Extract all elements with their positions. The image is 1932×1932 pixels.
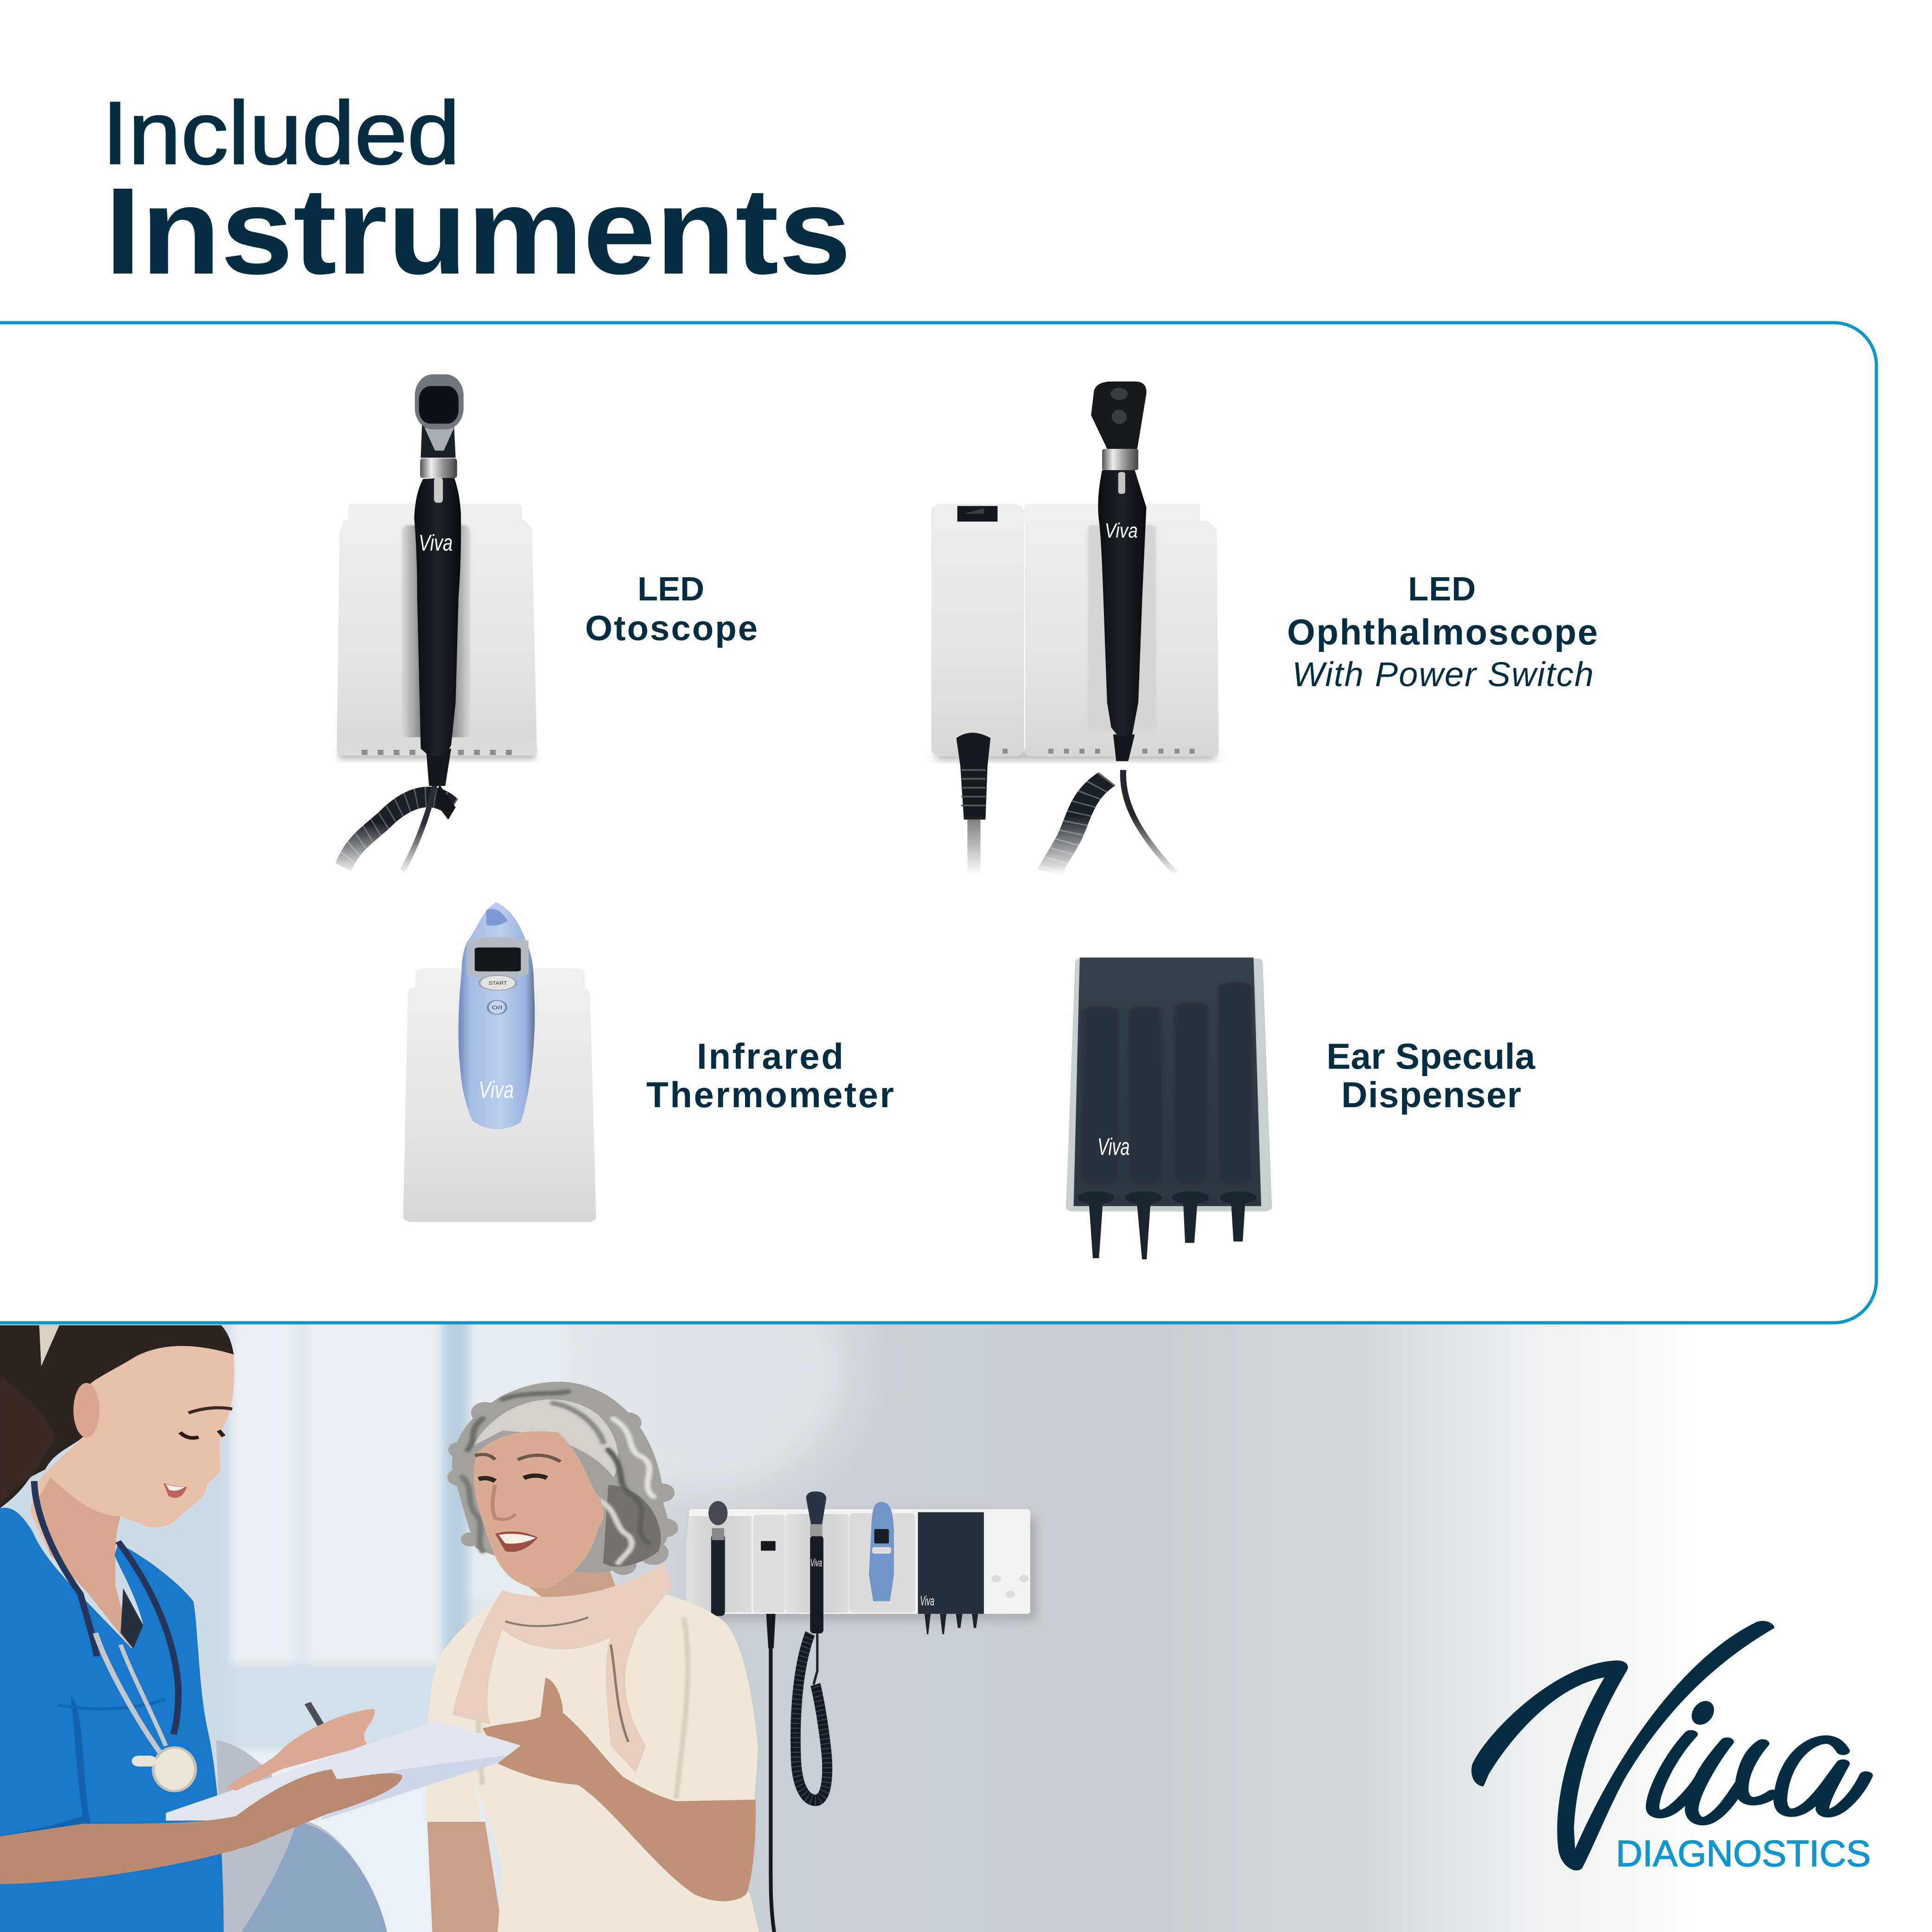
label: LED Otoscope (585, 571, 758, 648)
photo: nurse (0, 1325, 578, 1932)
photo: wall-mounted diagnostic unit: Viva (810, 1556, 822, 1569)
label: Infrared Thermometer: Thermometer (646, 1074, 894, 1115)
photo: wall-mounted diagnostic unit: Viva (920, 1594, 934, 1608)
photo: window background (0, 1324, 472, 1932)
patient face (474, 1431, 604, 1588)
ophthalmoscope (810, 1536, 823, 1633)
label: Ear Specula Dispenser: Ear Specula (1326, 1036, 1536, 1077)
instrument: ear specula dispenser (1066, 957, 1272, 1259)
patient arm right (483, 1678, 756, 1901)
otoscope (711, 1534, 725, 1616)
coiled cord (343, 797, 453, 867)
label: Ear Specula Dispenser: Dispenser (1341, 1074, 1521, 1115)
label: LED Ophthalmoscope With Power Switch (1287, 571, 1598, 694)
panel: instruments outline (0, 323, 1876, 1323)
nurse face and neck (30, 1346, 235, 1649)
power connector (956, 733, 990, 820)
patient arm left (427, 1822, 503, 1932)
seated patient shoulder (216, 1740, 387, 1932)
nurse forearm and hand (0, 1769, 402, 1884)
patient fingers over clipboard (490, 1724, 578, 1781)
stethoscope chest piece (153, 1747, 196, 1791)
right plate details (992, 1575, 1029, 1598)
nurse scrubs (0, 1508, 223, 1932)
instrument: infrared thermometer on base: START (489, 980, 507, 986)
coiled cord (1049, 779, 1107, 872)
modules (686, 1516, 752, 1613)
instrument: infrared thermometer on base (403, 902, 596, 1222)
nurse ear (73, 1383, 100, 1437)
instrument: infrared thermometer on base: O/I (491, 1005, 503, 1010)
instrument: infrared thermometer on base: Viva (478, 1076, 514, 1103)
instrument: LED ophthalmoscope with power switch (931, 382, 1219, 873)
fade: ophthalmoscope cords (946, 816, 1196, 875)
patient features (475, 1454, 561, 1552)
photo: senior patient (426, 1382, 759, 1932)
instrument: LED otoscope on wall base (337, 374, 537, 871)
instrument: LED ophthalmoscope with power switch: Viva (1104, 519, 1138, 542)
clipboard (166, 1721, 536, 1821)
label: LED Ophthalmoscope With Power Switch: With Power Switch (1292, 655, 1594, 694)
handle (1098, 470, 1146, 736)
specula tips (1078, 1191, 1256, 1259)
logo script: Viva (1472, 1621, 1866, 1870)
back plate (689, 1509, 1030, 1614)
label: LED Otoscope: Otoscope (585, 609, 758, 648)
nurse hair (0, 1325, 234, 1508)
label: Infrared Thermometer: Infrared (697, 1036, 843, 1077)
dispenser (918, 1512, 984, 1614)
instrument: ear specula dispenser: Viva (1097, 1133, 1130, 1160)
title: Included Instruments: Included (102, 83, 460, 183)
photo: wall-mounted diagnostic unit (686, 1492, 1036, 1932)
thermometer (869, 1502, 894, 1601)
nurse features (163, 1408, 232, 1498)
label: LED Ophthalmoscope With Power Switch: LED (1408, 571, 1476, 608)
label: Ear Specula Dispenser (1326, 1036, 1536, 1115)
patient sweater (426, 1590, 759, 1932)
label: LED Ophthalmoscope With Power Switch: Ophthalmoscope (1287, 612, 1598, 652)
coiled cord (796, 1633, 827, 1800)
cables (766, 1614, 776, 1648)
fade: otoscope cord (325, 823, 491, 875)
stethoscope (34, 1481, 179, 1753)
instrument: LED otoscope on wall base: Viva (419, 530, 453, 556)
nurse writing hand and pen (308, 1703, 338, 1753)
patient scarf (453, 1563, 674, 1773)
logo: Viva Diagnostics (1472, 1621, 1871, 1874)
patient hair (447, 1382, 678, 1575)
photo band: clinic background fading to white (465, 1324, 1623, 1932)
label: LED Otoscope: LED (638, 571, 704, 608)
patient neck (523, 1539, 618, 1606)
handle (414, 477, 461, 756)
label: Infrared Thermometer (646, 1036, 894, 1115)
logo wordmark: DIAGNOSTICS: DIAGNOSTICS (1616, 1833, 1871, 1874)
title: Included Instruments: Instruments (105, 162, 851, 300)
title: Included Instruments (102, 83, 851, 300)
